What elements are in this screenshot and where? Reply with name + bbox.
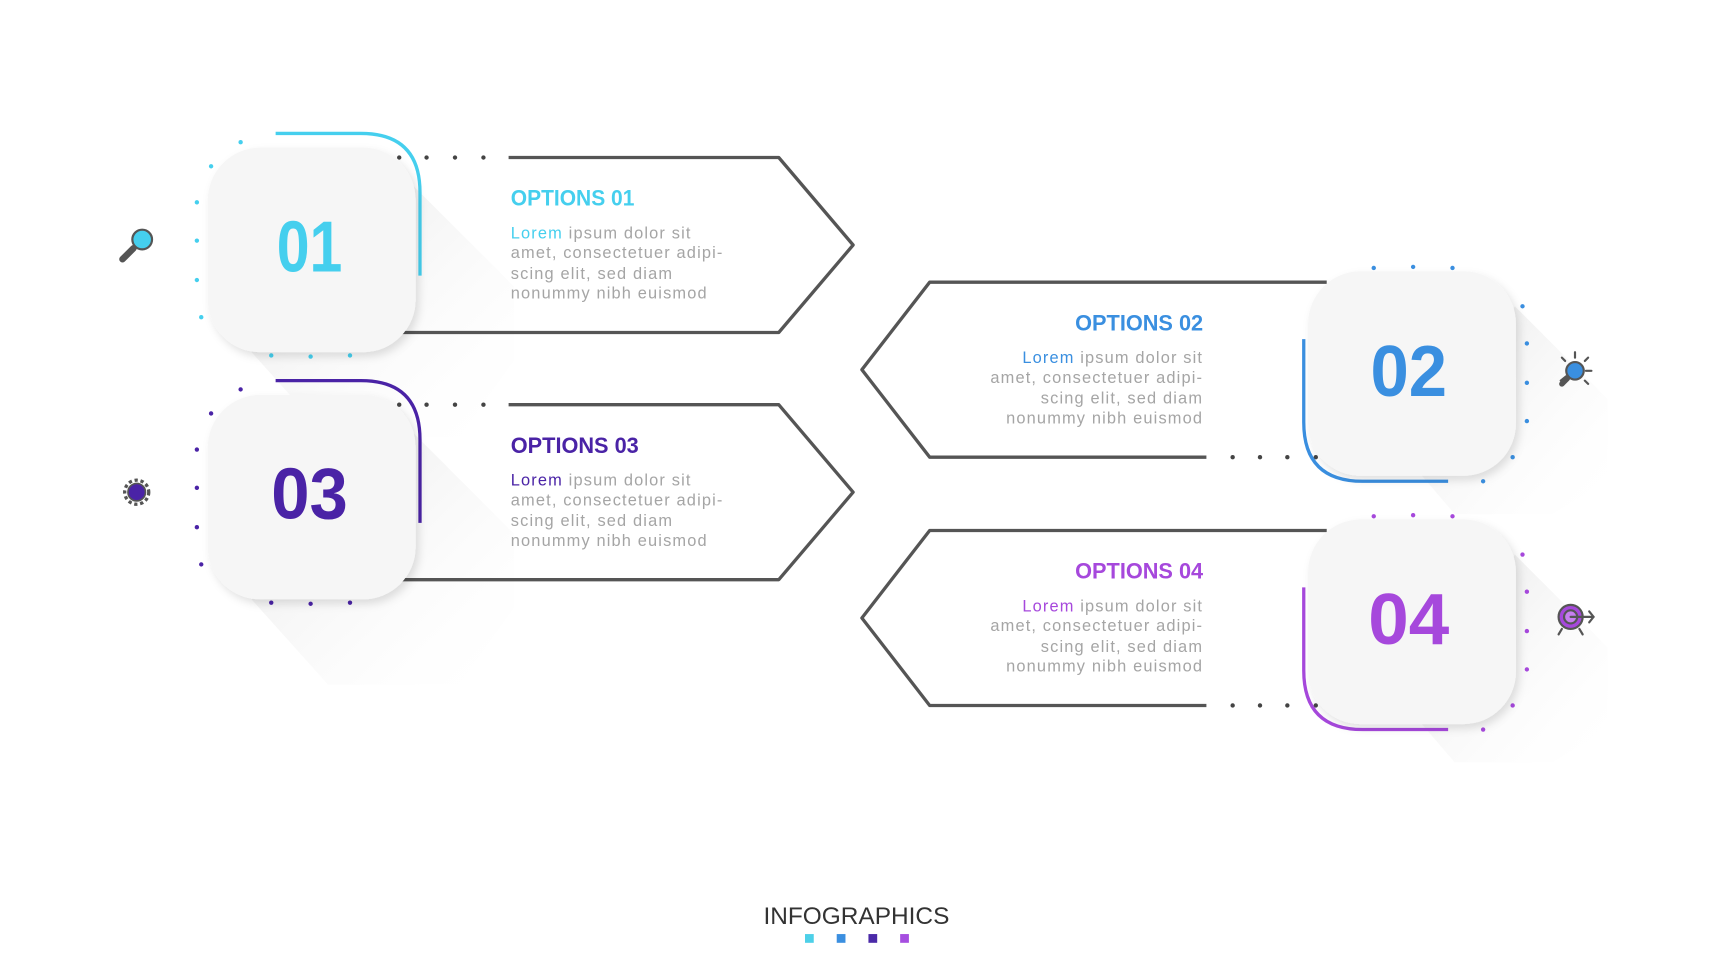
card 03 [195, 381, 420, 606]
text 02: amet, consectetuer adipi- [990, 369, 1203, 387]
shadow 02 [1422, 306, 1608, 514]
text 04: nonummy nibh euismod [1006, 658, 1203, 676]
text 03: OPTIONS 03 [511, 433, 639, 458]
text 02: nonummy nibh euismod [1006, 409, 1203, 427]
text 01: amet, consectetuer adipi- [511, 244, 724, 262]
card 01 [195, 133, 420, 359]
step 03 [125, 381, 853, 685]
text 02 [990, 310, 1203, 427]
text 01: OPTIONS 01 [511, 186, 634, 211]
card 02 [1304, 265, 1529, 483]
icon: light bulb [1561, 352, 1591, 384]
text 04: OPTIONS 04 [1075, 559, 1204, 584]
step 02 [862, 265, 1608, 514]
text 03: scing elit, sed diam [511, 512, 673, 530]
icon: gear [125, 480, 149, 504]
shadow 01 [252, 186, 514, 438]
arrow outline 02 [862, 282, 1327, 457]
step 04: 04 [1368, 580, 1449, 660]
text 02: scing elit, sed diam [1041, 390, 1203, 408]
arrow outline 03 [394, 405, 853, 580]
arrow outline 01 [394, 158, 853, 332]
text 04 [990, 559, 1204, 676]
step 04 [862, 513, 1608, 762]
step 01 [122, 133, 853, 438]
card 01: 01 [277, 207, 342, 287]
text 04: Lorem ipsum dolor sit [1022, 597, 1203, 615]
card 03: 03 [271, 454, 348, 534]
text 03: nonummy nibh euismod [511, 532, 708, 550]
text 04: scing elit, sed diam [1041, 638, 1203, 656]
shadow 04 [1422, 555, 1608, 762]
shadow 03 [252, 433, 514, 685]
text 03: Lorem ipsum dolor sit [511, 472, 692, 490]
text 01: nonummy nibh euismod [511, 285, 708, 303]
text 01: scing elit, sed diam [511, 265, 673, 283]
text 04: amet, consectetuer adipi- [990, 617, 1203, 635]
text 03 [511, 433, 724, 550]
icon: magnifier [122, 230, 152, 259]
text 01: Lorem ipsum dolor sit [511, 224, 692, 242]
step 02: 02 [1370, 332, 1447, 412]
footer title [763, 903, 949, 943]
footer title: INFOGRAPHICS [763, 903, 949, 930]
icon: target [1559, 605, 1594, 634]
card 04 [1304, 513, 1529, 732]
arrow outline 04 [862, 530, 1327, 705]
text 02: Lorem ipsum dolor sit [1022, 349, 1203, 367]
text 02: OPTIONS 02 [1075, 310, 1203, 335]
text 01 [511, 186, 724, 303]
text 03: amet, consectetuer adipi- [511, 491, 724, 509]
